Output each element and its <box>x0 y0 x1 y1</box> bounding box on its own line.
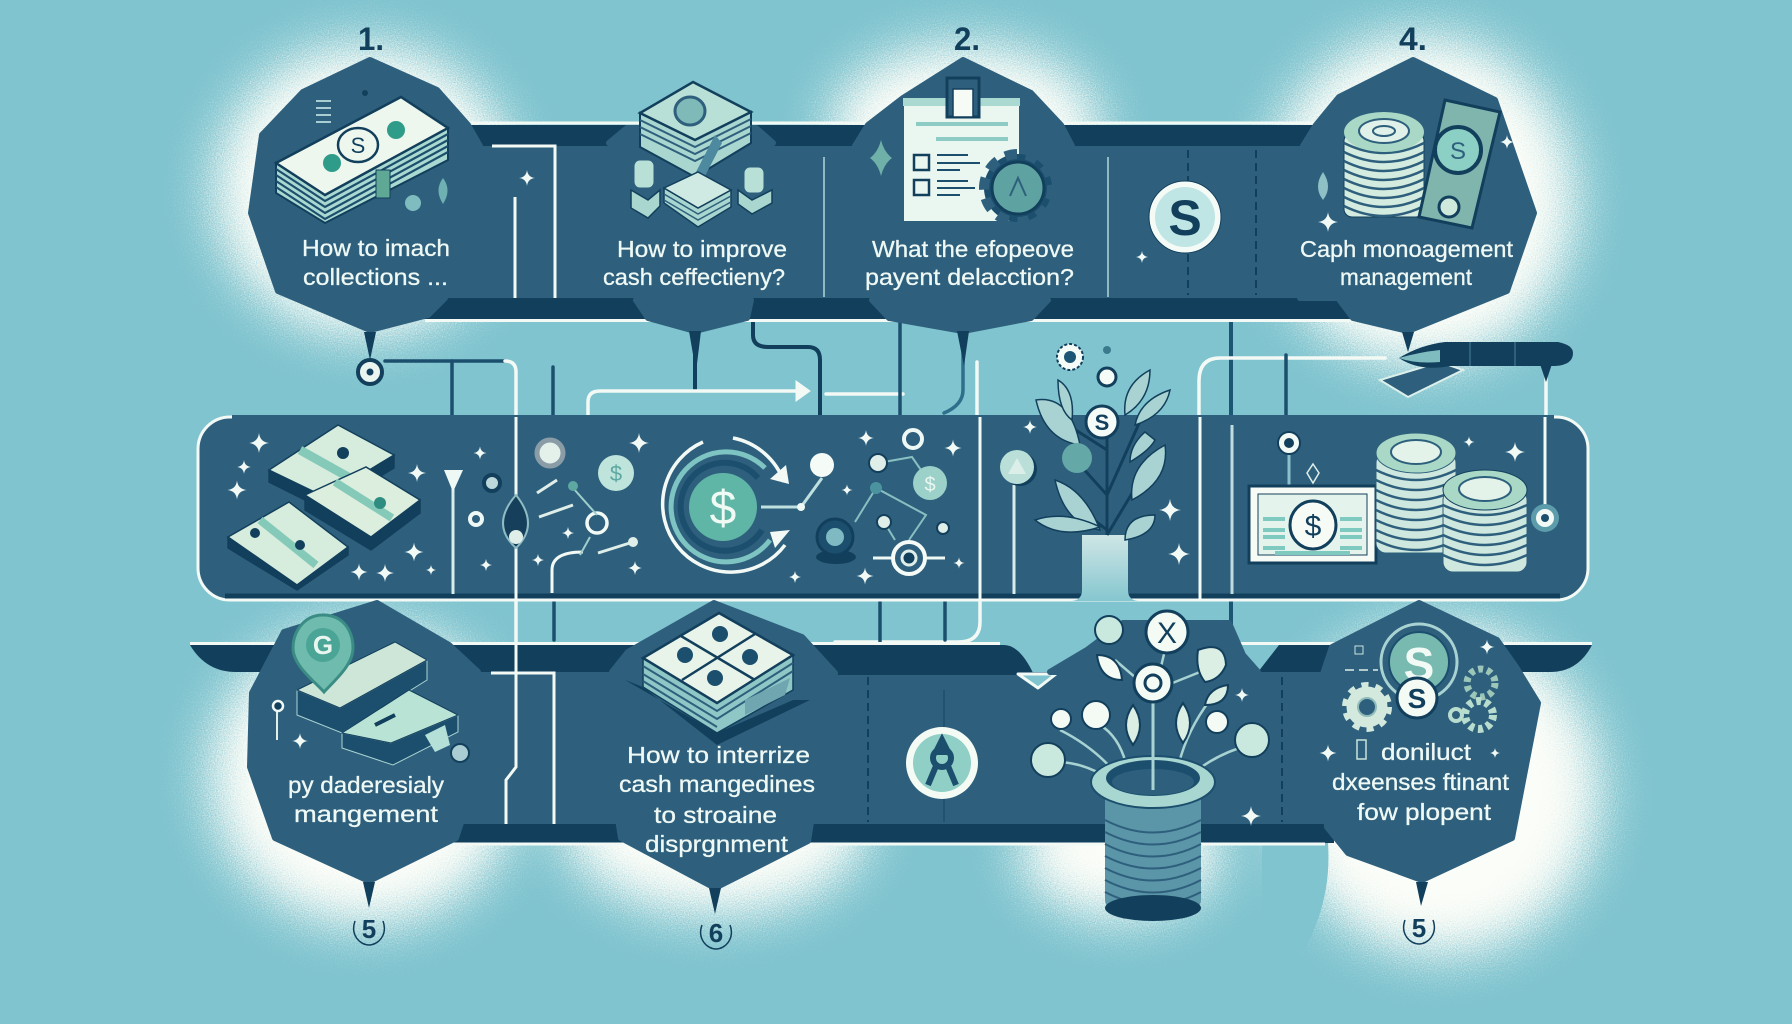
panel 6 text <box>619 742 815 857</box>
number 4: 4. <box>1399 21 1427 57</box>
panel 8 text <box>1332 739 1510 825</box>
icon: cash stacks in middle band <box>228 425 420 590</box>
icon: potted plant with coin leaves <box>1031 611 1269 921</box>
panel 5 text: py daderesialy <box>288 772 445 798</box>
icon: lollipop node <box>1000 450 1037 486</box>
panel: hexagon bumps of top row <box>251 60 1534 331</box>
bottom row dividers <box>491 640 1282 824</box>
icon: banknote in middle band <box>1249 486 1376 563</box>
icon: growing plant with coins in middle band: S <box>1095 410 1109 435</box>
light stem notch in middle band <box>1070 535 1140 601</box>
panel 1 text: collections ... <box>303 264 448 290</box>
bottom number 5 right: 5 <box>1412 913 1426 943</box>
panel 4 text <box>1300 236 1514 290</box>
icon: cash stack panel 1: S <box>351 133 365 158</box>
triangle marker <box>444 470 463 492</box>
icon: S coin in top band <box>1149 181 1221 253</box>
panel 6 text: to stroaine <box>654 802 777 828</box>
icon: pin and cash panel 5 <box>273 615 469 765</box>
panel dividers in top band <box>492 146 1256 298</box>
panel 2 text <box>603 236 787 290</box>
icon: coin stack and phone panel 4 <box>1318 100 1514 232</box>
panel 1 text <box>302 235 450 290</box>
sparkles middle band <box>228 420 1525 584</box>
panel 6 text: cash mangedines <box>619 771 815 797</box>
panel 2 text: How to improve <box>617 236 787 262</box>
teal curve cut between plant glow and right glow <box>1262 843 1328 950</box>
icon: central dollar coin with circular arrows <box>663 438 790 572</box>
vertical lines in middle band <box>453 417 1545 600</box>
icon: coins and gears panel 8: S <box>1404 638 1434 690</box>
icon: coins and gears panel 8: S <box>1408 683 1426 714</box>
icon: pin and cash panel 5: G <box>313 630 333 660</box>
numbered node under panel 1 <box>358 360 382 384</box>
panel 3 text <box>865 236 1074 290</box>
connector lines between rows <box>385 320 1546 650</box>
icon: coin stacks in middle band <box>1376 433 1527 572</box>
panel 6 text: disprgnment <box>645 831 789 857</box>
icon: cash bundle panel 6 <box>625 613 810 745</box>
panel 5 text: mangement <box>294 801 439 827</box>
bottom number 5 left <box>354 914 384 945</box>
icon: round ribbon badge bottom band <box>906 727 978 799</box>
icon: potted plant with coin leaves: X <box>1157 617 1177 650</box>
icon: coins and gears panel 8 <box>1345 624 1495 729</box>
panel 8 text: fow plopent <box>1357 799 1492 825</box>
panel 3 text: What the efopeove <box>872 236 1074 262</box>
panel 8 text: dxeenses ftinant <box>1332 769 1510 795</box>
network nodes right of central coin: $ <box>924 474 936 496</box>
bottom number 6: 6 <box>709 918 723 948</box>
icon: banknote in middle band: $ <box>1305 510 1322 543</box>
icon: coin stack and phone panel 4: S <box>1450 138 1466 165</box>
small ring nodes in middle band <box>1278 432 1559 532</box>
bottom number 6 <box>701 918 731 949</box>
icon: pen and paper <box>1380 342 1573 397</box>
icon: S coin in top band: S <box>1168 190 1202 246</box>
bottom number 5 left: 5 <box>362 914 376 944</box>
bottom number 5 right <box>1404 913 1434 944</box>
icon: document with clip and gear panel 3 <box>903 78 1052 222</box>
panel 4 text: management <box>1340 264 1473 290</box>
sparkles top band <box>362 90 1148 263</box>
icon: cubes and coin stacks panel 2 <box>631 82 772 227</box>
network nodes right of central coin <box>761 430 949 574</box>
panel: bottom band <box>190 639 1592 846</box>
panel 2 text: cash ceffectieny? <box>603 264 785 290</box>
network nodes left of central coin <box>470 440 638 555</box>
panel 3 text: payent delacction? <box>865 264 1074 290</box>
panel 1 text: How to imach <box>302 235 450 261</box>
pins under bottom row <box>363 882 1428 914</box>
white grainy glows behind panels <box>210 35 1600 955</box>
number 2: 2. <box>954 21 980 57</box>
panel 8 text: doniluct <box>1381 739 1472 765</box>
pins under top row <box>364 331 1414 372</box>
panel: top band <box>360 122 1430 322</box>
number 1: 1. <box>358 21 384 57</box>
icon: cash stack panel 1 <box>276 97 448 223</box>
panel 5 text <box>288 772 445 827</box>
panel 6 text: How to interrize <box>627 742 810 768</box>
panel: middle band <box>198 415 1588 600</box>
icon: central dollar coin with circular arrows: $ <box>710 482 736 535</box>
panel 4 text: Caph monoagement <box>1300 236 1514 262</box>
small marks panel 8 <box>1320 640 1500 762</box>
icon: growing plant with coins in middle band <box>1035 344 1170 540</box>
network nodes left of central coin: $ <box>610 461 622 486</box>
panel: hexagon shapes of bottom row <box>250 603 1538 888</box>
